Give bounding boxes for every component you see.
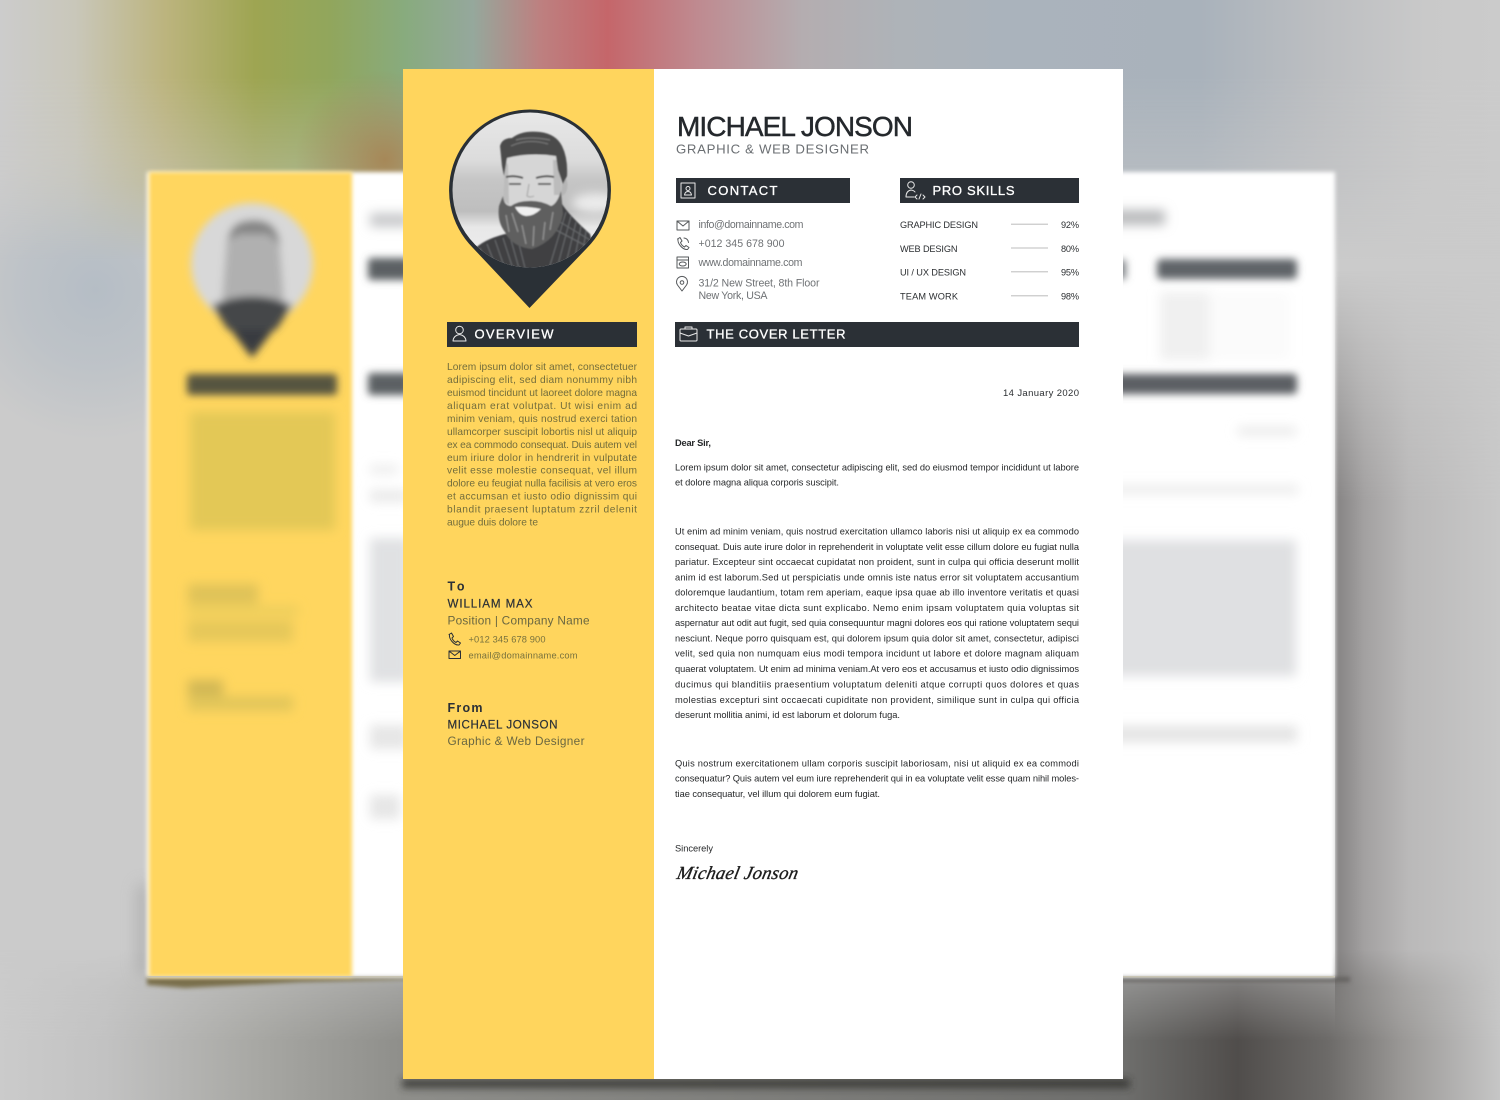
skills list — [900, 220, 1079, 302]
overview paragraph: aliquam erat volutpat. Ut wisi enim ad — [447, 401, 637, 412]
icon: briefcase — [680, 327, 697, 341]
icon: phone — [678, 238, 689, 250]
overview heading bar: OVERVIEW — [474, 326, 554, 342]
overview paragraph: ex ea commodo consequat. Duis autem vel — [447, 440, 637, 451]
overview paragraph: dolore eu feugiat nulla facilisis at vero eros — [447, 478, 637, 490]
portrait photo — [452, 112, 608, 268]
skills list: WEB DESIGN — [900, 244, 958, 254]
letter body: Ut enim ad minim veniam, quis nostrud exercitation ullamco laboris nisi ut aliquip ex ea commodo — [675, 526, 1079, 536]
skills list: TEAM WORK — [900, 292, 959, 302]
overview paragraph: minim veniam, quis nostrud exerci tation — [447, 414, 637, 425]
letter body: doloremque laudantium, totam rem aperiam, eaque ipsa quae ab illo inventore veritatis et quasi — [675, 588, 1079, 598]
job subtitle: GRAPHIC & WEB DESIGNER — [676, 142, 869, 156]
letter body — [675, 438, 1080, 854]
back page, out of focus — [147, 172, 1350, 988]
icon: person with code — [906, 182, 925, 199]
recipient block: WILLIAM MAX — [448, 598, 533, 610]
overview paragraph: velit esse molestie consequat, vel illum — [447, 466, 637, 476]
contact heading bar: CONTACT — [708, 183, 778, 198]
letter body: tiae consequatur, vel illum qui dolorem eum fugiat. — [675, 789, 880, 799]
contact list: +012 345 678 900 — [698, 238, 785, 250]
letter body: Lorem ipsum dolor sit amet, consectetur adipiscing elit, sed do eiusmod tempor incididunt ut labore — [675, 462, 1079, 472]
icon: location — [676, 276, 688, 291]
overview paragraph: blandit praesent luptatum zzril delenit — [447, 504, 637, 516]
skills list: 95% — [1061, 268, 1079, 278]
letter body: nesciunt. Neque porro quisquam est, qui dolorem ipsum quia dolor sit amet, consectetur, adipisci — [675, 634, 1079, 644]
letter body: consequatur? Quis autem vel eum iure reprehenderit qui in ea voluptate velit esse quam nihil moles- — [675, 774, 1079, 784]
sender block: From — [448, 701, 482, 715]
cover letter heading bar: THE COVER LETTER — [706, 326, 846, 342]
sender block — [448, 701, 585, 748]
signature: Michael Jonson — [674, 863, 800, 884]
contact heading bar — [676, 178, 850, 203]
overview paragraph: adipiscing elit, sed diam nonummy nibh — [447, 375, 637, 386]
letter body: quaerat voluptatem. Ut enim ad minima veniam.At vero eos et accusamus et iusto odio dignissimos — [675, 664, 1079, 674]
profile photo pin — [449, 110, 620, 308]
recipient block: +012 345 678 900 — [468, 634, 546, 644]
letter body: Dear Sir, — [675, 438, 711, 448]
contact list: New York, USA — [698, 290, 768, 302]
letter body: aspernatur aut odit aut fugit, sed quia consequuntur magni dolores eos qui ratione voluptatem sequi — [675, 618, 1079, 628]
skills list: GRAPHIC DESIGN — [900, 220, 978, 230]
letter body: et dolore magna aliqua corporis suscipit. — [675, 478, 839, 488]
skills list: 92% — [1061, 220, 1079, 230]
letter body: ducimus qui blanditiis praesentium voluptatum deleniti atque corrupti quos dolores et quas — [675, 680, 1079, 690]
letter body: Quis nostrum exercitationem ullam corporis suscipit laboriosam, nisi ut aliquid ex ea commodi — [675, 758, 1079, 768]
contact list: 31/2 New Street, 8th Floor — [698, 278, 820, 290]
contact list: www.domainname.com — [698, 257, 803, 269]
overview paragraph — [447, 362, 638, 528]
letter body: molestias excepturi sint occaecati cupiditate non provident, similique sunt in culpa qui officia — [675, 695, 1080, 705]
icon: person — [453, 326, 466, 341]
overview paragraph: eum iriure dolor in hendrerit in vulputate — [447, 453, 637, 464]
recipient block: email@domainname.com — [468, 650, 578, 660]
front page sheet — [403, 69, 1123, 1079]
overview paragraph: Lorem ipsum dolor sit amet, consectetuer — [447, 362, 638, 373]
letter body: anim id est laborum.Sed ut perspiciatis unde omnis iste natus error sit voluptatem accusantium — [675, 572, 1079, 582]
name title: MICHAEL JONSON — [677, 111, 913, 142]
recipient block: Position | Company Name — [448, 614, 590, 628]
icon: envelope — [449, 651, 460, 658]
icon: mail — [677, 221, 689, 230]
letter body: deserunt mollitia animi, id est laborum et dolorum fuga. — [675, 710, 900, 720]
icon: address book — [681, 183, 695, 198]
sender block: MICHAEL JONSON — [448, 718, 558, 732]
recipient block — [448, 580, 590, 660]
letter body: velit, sed quia non numquam eius modi tempora incidunt ut labore et dolore magnam aliquam — [675, 648, 1079, 658]
skills list: 80% — [1061, 244, 1079, 254]
skills list: UI / UX DESIGN — [900, 268, 966, 278]
recipient block: To — [448, 580, 465, 594]
letter body: architecto beatae vitae dicta sunt explicabo. Nemo enim ipsam voluptatem quia voluptas sit — [675, 603, 1079, 613]
front page shadow — [402, 1079, 1130, 1088]
sender block: Graphic & Web Designer — [448, 734, 585, 748]
pro skills heading bar — [900, 178, 1079, 203]
skills list: 98% — [1061, 292, 1079, 302]
letter body: consequat. Duis aute irure dolor in reprehenderit in voluptate velit esse cillum dolore eu fugiat nulla — [675, 542, 1080, 552]
icon: phone — [449, 633, 460, 645]
letter date: 14 January 2020 — [1003, 388, 1079, 399]
overview paragraph: et accumsan et iusto odio dignissim qui — [447, 492, 637, 502]
yellow sidebar — [403, 69, 654, 1079]
cover letter heading bar — [675, 322, 1079, 347]
overview paragraph: euismod tincidunt ut laoreet dolore magna — [447, 388, 637, 399]
pro skills heading bar: PRO SKILLS — [932, 183, 1015, 198]
overview paragraph: augue duis dolore te — [447, 518, 538, 528]
overview heading bar — [447, 322, 637, 347]
letter body: pariatur. Excepteur sint occaecat cupidatat non proident, sunt in culpa qui officia deserunt mollit — [675, 557, 1079, 567]
contact list — [676, 219, 820, 302]
icon: web — [677, 257, 688, 268]
letter body: Sincerely — [675, 844, 713, 854]
overview paragraph: ullamcorper suscipit lobortis nisl ut aliquip — [447, 427, 637, 438]
contact list: info@domainname.com — [698, 219, 804, 231]
